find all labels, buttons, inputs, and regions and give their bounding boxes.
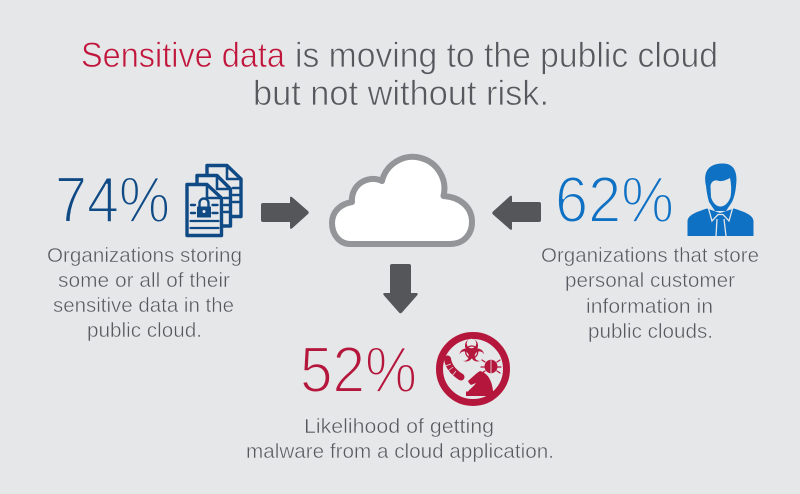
title [81,36,718,113]
title: Sensitive data [81,36,285,75]
description [541,244,759,343]
title: is moving to the public cloud [295,36,718,75]
description: malware from a cloud application. [246,440,554,463]
stat: 74%: 74% [55,163,170,236]
description: public clouds. [588,320,713,343]
panel: 62% personal customer information [541,163,759,343]
icon: bug [481,360,501,373]
description: Organizations that store [541,244,759,267]
icon: cloud [332,157,472,244]
arrow: right into cloud [492,196,541,230]
icon: locked documents [187,166,241,236]
description: Organizations storing [47,244,242,267]
description: public cloud. [87,319,202,342]
panel: 52% malware likelihood [246,333,554,463]
description [47,244,242,342]
icon: biohazard [459,339,484,362]
title: but not without risk. [253,74,549,113]
panel: 74% organizations storing sensitive data [47,163,242,342]
arrow: left into cloud [261,197,309,229]
arrow: down from cloud [383,264,418,313]
description: Likelihood of getting [304,415,494,438]
icon: malware threats in ring [440,336,506,402]
icon: chess knight [466,371,494,396]
description [246,415,554,463]
description: information in [586,295,713,318]
stat: 62%: 62% [555,163,674,236]
icon: businessman [688,163,754,236]
stat: 52%: 52% [300,333,417,406]
description: personal customer [565,269,735,292]
icon: worm [445,359,461,377]
description: sensitive data in the [53,294,234,317]
description: some or all of their [58,269,230,292]
